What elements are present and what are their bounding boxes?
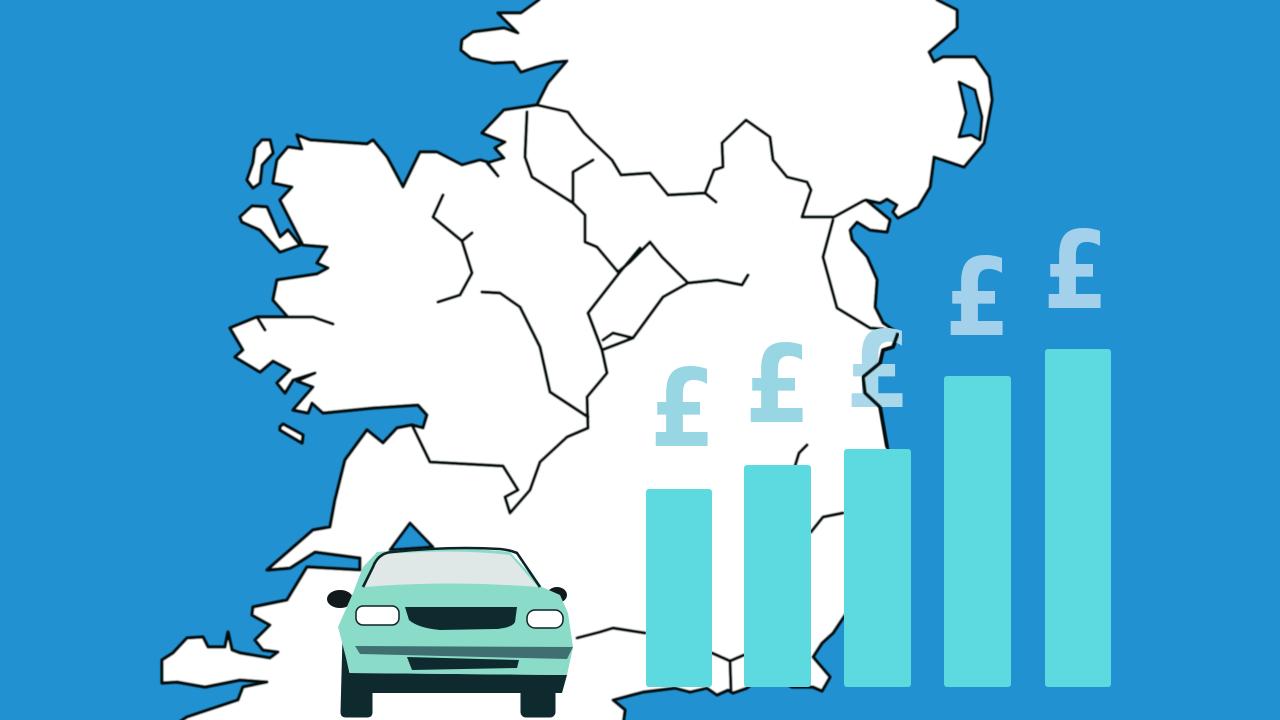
underbody: [348, 673, 567, 693]
left headlight: [356, 606, 399, 625]
front grille: [405, 607, 517, 630]
bar chart with pound symbols: [646, 208, 1111, 687]
eastern lagoon: [959, 82, 982, 140]
bar 4: [944, 376, 1011, 687]
left wheel: [340, 637, 373, 718]
western island: [240, 206, 300, 252]
bar 5: [1045, 349, 1111, 687]
boundary: between bars: [712, 445, 843, 690]
north-west island: [247, 140, 273, 188]
pound symbol 4: £: [945, 235, 1010, 361]
boundary: western curve: [482, 292, 588, 417]
coast line over pound symbol: [863, 333, 898, 447]
bar 3: [844, 449, 911, 687]
right wheel: [520, 685, 556, 718]
bar 1: [646, 489, 712, 687]
land mass: [162, 0, 992, 720]
windscreen: [365, 552, 538, 587]
car body: [338, 548, 573, 675]
right mirror: [547, 587, 567, 603]
map of Britain and Ireland: [162, 0, 992, 720]
car: [327, 548, 573, 718]
pound symbol 5: £: [1043, 208, 1108, 334]
pound symbol 1: £: [650, 346, 715, 472]
regional boundary lines: [412, 105, 883, 690]
boundary: central peak: [602, 242, 748, 350]
roof and pillar outline: [363, 548, 540, 587]
boundary: central diagonal: [412, 248, 640, 513]
bumper strip: [355, 646, 573, 659]
boundary: north-east: [823, 220, 883, 329]
right headlight: [527, 610, 563, 628]
pound symbol 3: £: [846, 310, 910, 433]
boundary: southern line: [577, 628, 645, 638]
lower grille: [407, 657, 519, 670]
boundary: inner west: [433, 195, 472, 302]
boundary: short branch: [573, 160, 593, 202]
blue bay behind car: [390, 523, 433, 550]
boundary: north-west spine: [525, 112, 618, 272]
pound symbol 2: £: [745, 322, 810, 448]
bar 2: [744, 465, 811, 687]
boundary: north: [537, 105, 866, 217]
small western island: [280, 424, 303, 443]
left mirror: [327, 590, 353, 608]
